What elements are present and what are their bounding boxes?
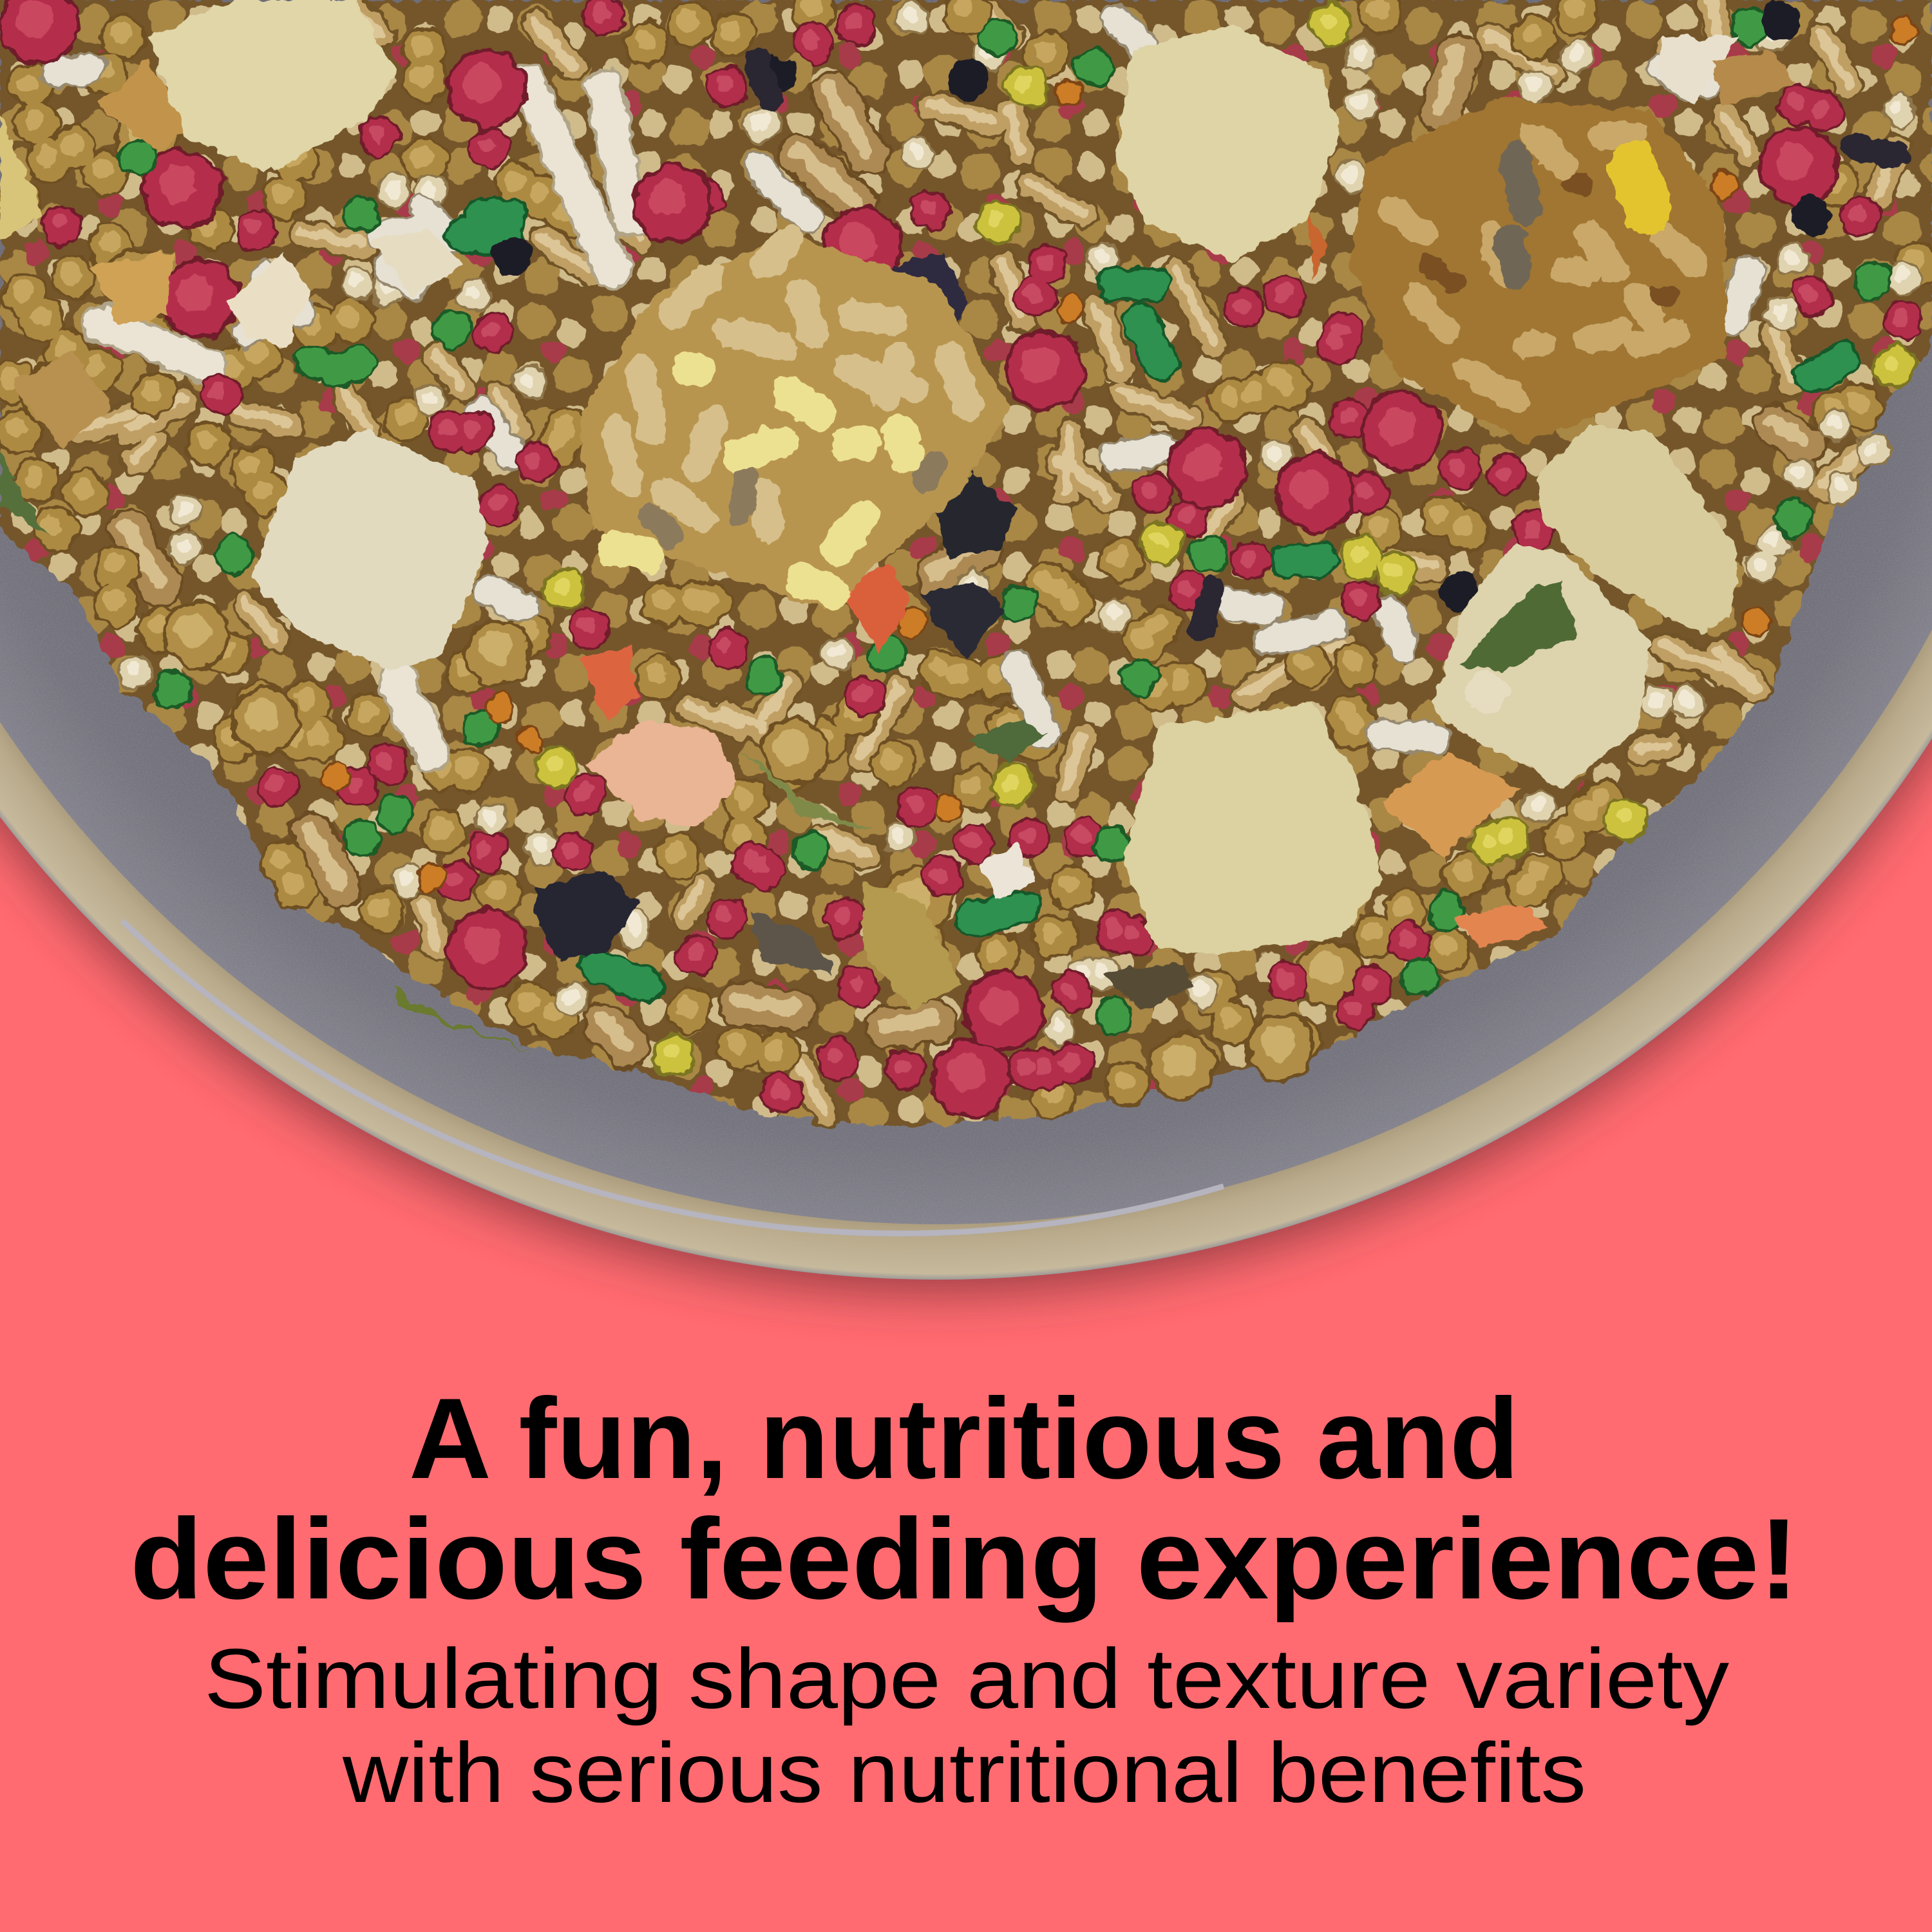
orange millet seeds [335, 31, 1904, 877]
subheading line 1: Stimulating shape and texture variety [204, 1631, 1729, 1726]
green pellets [138, 27, 1873, 1016]
headline line 1: A fun, nutritious and [409, 1374, 1519, 1502]
subheading [204, 1631, 1729, 1820]
plate: tan stoneware rim [0, 0, 1932, 1280]
plate: grey glazed well [0, 0, 1932, 1224]
subheading line 2: with serious nutritional benefits [342, 1725, 1586, 1820]
leaf fragment on crisp [1460, 579, 1577, 672]
yellow pellets [554, 22, 1894, 1054]
headline line 2: delicious feeding experience! [130, 1495, 1799, 1623]
carrot and fruit chips [0, 37, 1799, 1054]
red fruit pellets [35, 12, 1904, 1094]
headline [130, 1374, 1799, 1623]
central granola cluster [579, 234, 1010, 610]
plate [0, 0, 1932, 1288]
cream round seeds [135, 16, 1904, 1029]
tan kibble pellets [10, 6, 1916, 1097]
oat seeds [79, 0, 1897, 1115]
plate shadow on background [0, 0, 1932, 1294]
food base mass [0, 0, 1932, 1128]
right granola cluster [1349, 99, 1725, 444]
food mix on the plate [0, 0, 1932, 1128]
seed on crisp [1466, 672, 1508, 714]
cereal crisp chunks [148, 0, 1740, 955]
dark seeds [511, 21, 1897, 959]
white seeds and coconut strips [55, 19, 1750, 754]
